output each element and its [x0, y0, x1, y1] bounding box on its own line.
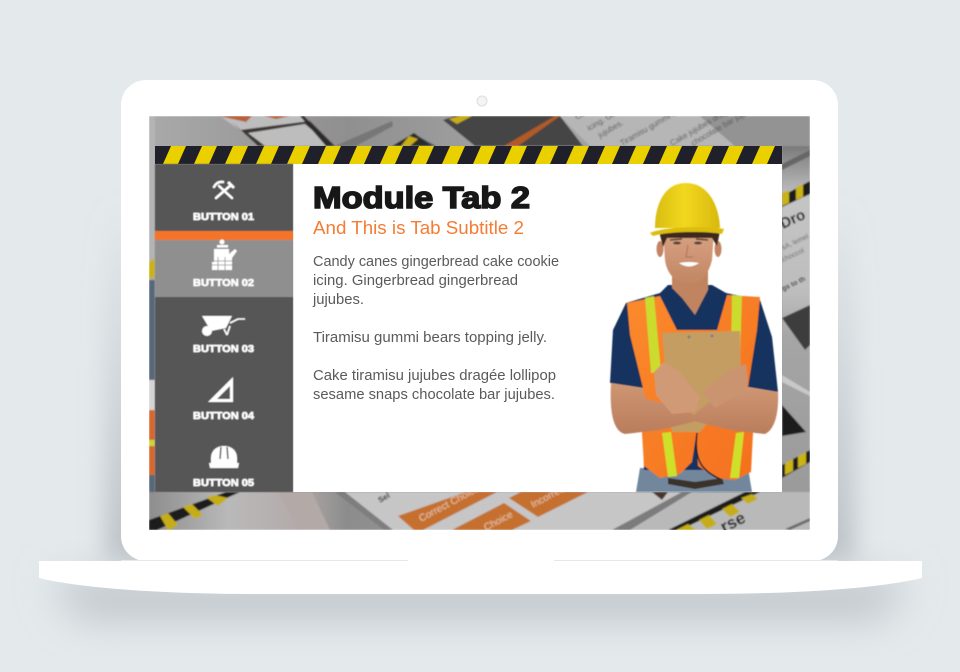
laptop shadow: [50, 200, 910, 618]
orange safety vest: [627, 295, 760, 480]
laptop screen background collage: Sel: [376, 491, 391, 505]
button 01: [193, 182, 254, 223]
navy polo shirt: [610, 285, 778, 470]
title: Module Tab 2: [313, 180, 530, 215]
button 04: [193, 377, 254, 422]
top left card: [220, 116, 333, 146]
face details: [670, 239, 708, 266]
laptop screen background collage: [149, 89, 810, 537]
icon: set square: [208, 377, 233, 402]
body text: [312, 254, 559, 403]
laptop screen background collage: icing. Ginger: [586, 102, 629, 133]
head: [663, 232, 714, 284]
right collage: [782, 146, 810, 494]
crossed arms: [611, 362, 778, 434]
hard hat: [650, 183, 724, 236]
laptop screen background collage: Cake jujubes dragée: [668, 103, 737, 148]
icon: wheelbarrow: [202, 316, 245, 336]
button 03: [193, 316, 254, 355]
hair: [659, 231, 720, 247]
label: button 05: BUTTON 05: [193, 477, 254, 489]
laptop screen background collage: sA, lemel: [781, 233, 810, 252]
jeans: [636, 468, 752, 492]
neck: [672, 268, 708, 315]
laptop screen background collage: Choice: [482, 509, 515, 534]
laptop screen background collage: Correct Choice: [417, 483, 482, 525]
body text: Tiramisu gummi bears topping jelly.: [313, 330, 547, 346]
laptop lid: [121, 80, 838, 561]
active tab highlight: [155, 240, 293, 297]
laptop screen background collage: rse: [717, 508, 749, 537]
laptop screen background collage: Incorrect: [529, 483, 569, 511]
laptop screen background collage: Candy canes: [573, 89, 618, 122]
top text card: [560, 116, 735, 146]
body text: Cake tiramisu jujubes dragée lollipop: [313, 368, 556, 384]
laptop screen background collage: choccol: [781, 247, 806, 264]
button 05: [193, 446, 254, 489]
laptop screen background collage: Dro: [778, 206, 808, 233]
left collage: [150, 116, 154, 260]
body text: sesame snaps chocolate bar jujubes.: [313, 387, 555, 403]
laptop screen background collage: chocolate bar jujubes: [690, 102, 759, 148]
bottom collage: [149, 491, 328, 530]
laptop screen background collage: Tiramisu gummi bears: [618, 101, 691, 148]
label: button 02: BUTTON 02: [193, 277, 254, 289]
construction worker photo: [610, 183, 778, 492]
active tab orange bar: [155, 231, 293, 240]
webcam: [477, 96, 487, 106]
icon: bricks and trowel: [212, 240, 237, 270]
clipboard: [662, 331, 741, 432]
body text: jujubes.: [312, 292, 364, 308]
laptop mockup scene: [39, 80, 922, 634]
content panel: [293, 164, 782, 492]
sidebar menu: [155, 164, 293, 492]
label: button 01: BUTTON 01: [193, 211, 254, 223]
laptop screen background collage: jujubes.: [596, 118, 625, 140]
button 02: [193, 240, 254, 289]
laptop screen background collage: gs to th: [781, 276, 807, 293]
body text: icing. Gingerbread gingerbread: [313, 273, 518, 289]
icon: hammer and wrench: [214, 182, 233, 198]
label: button 03: BUTTON 03: [193, 343, 254, 355]
subtitle: And This is Tab Subtitle 2: [313, 218, 524, 238]
vest reflective stripes: [645, 296, 661, 373]
laptop base: [39, 560, 922, 594]
hazard stripe banner: [155, 146, 782, 164]
label: button 04: BUTTON 04: [193, 410, 254, 422]
body text: Candy canes gingerbread cake cookie: [313, 254, 559, 270]
top dark card: [443, 116, 583, 146]
icon: hard hat: [209, 446, 239, 468]
